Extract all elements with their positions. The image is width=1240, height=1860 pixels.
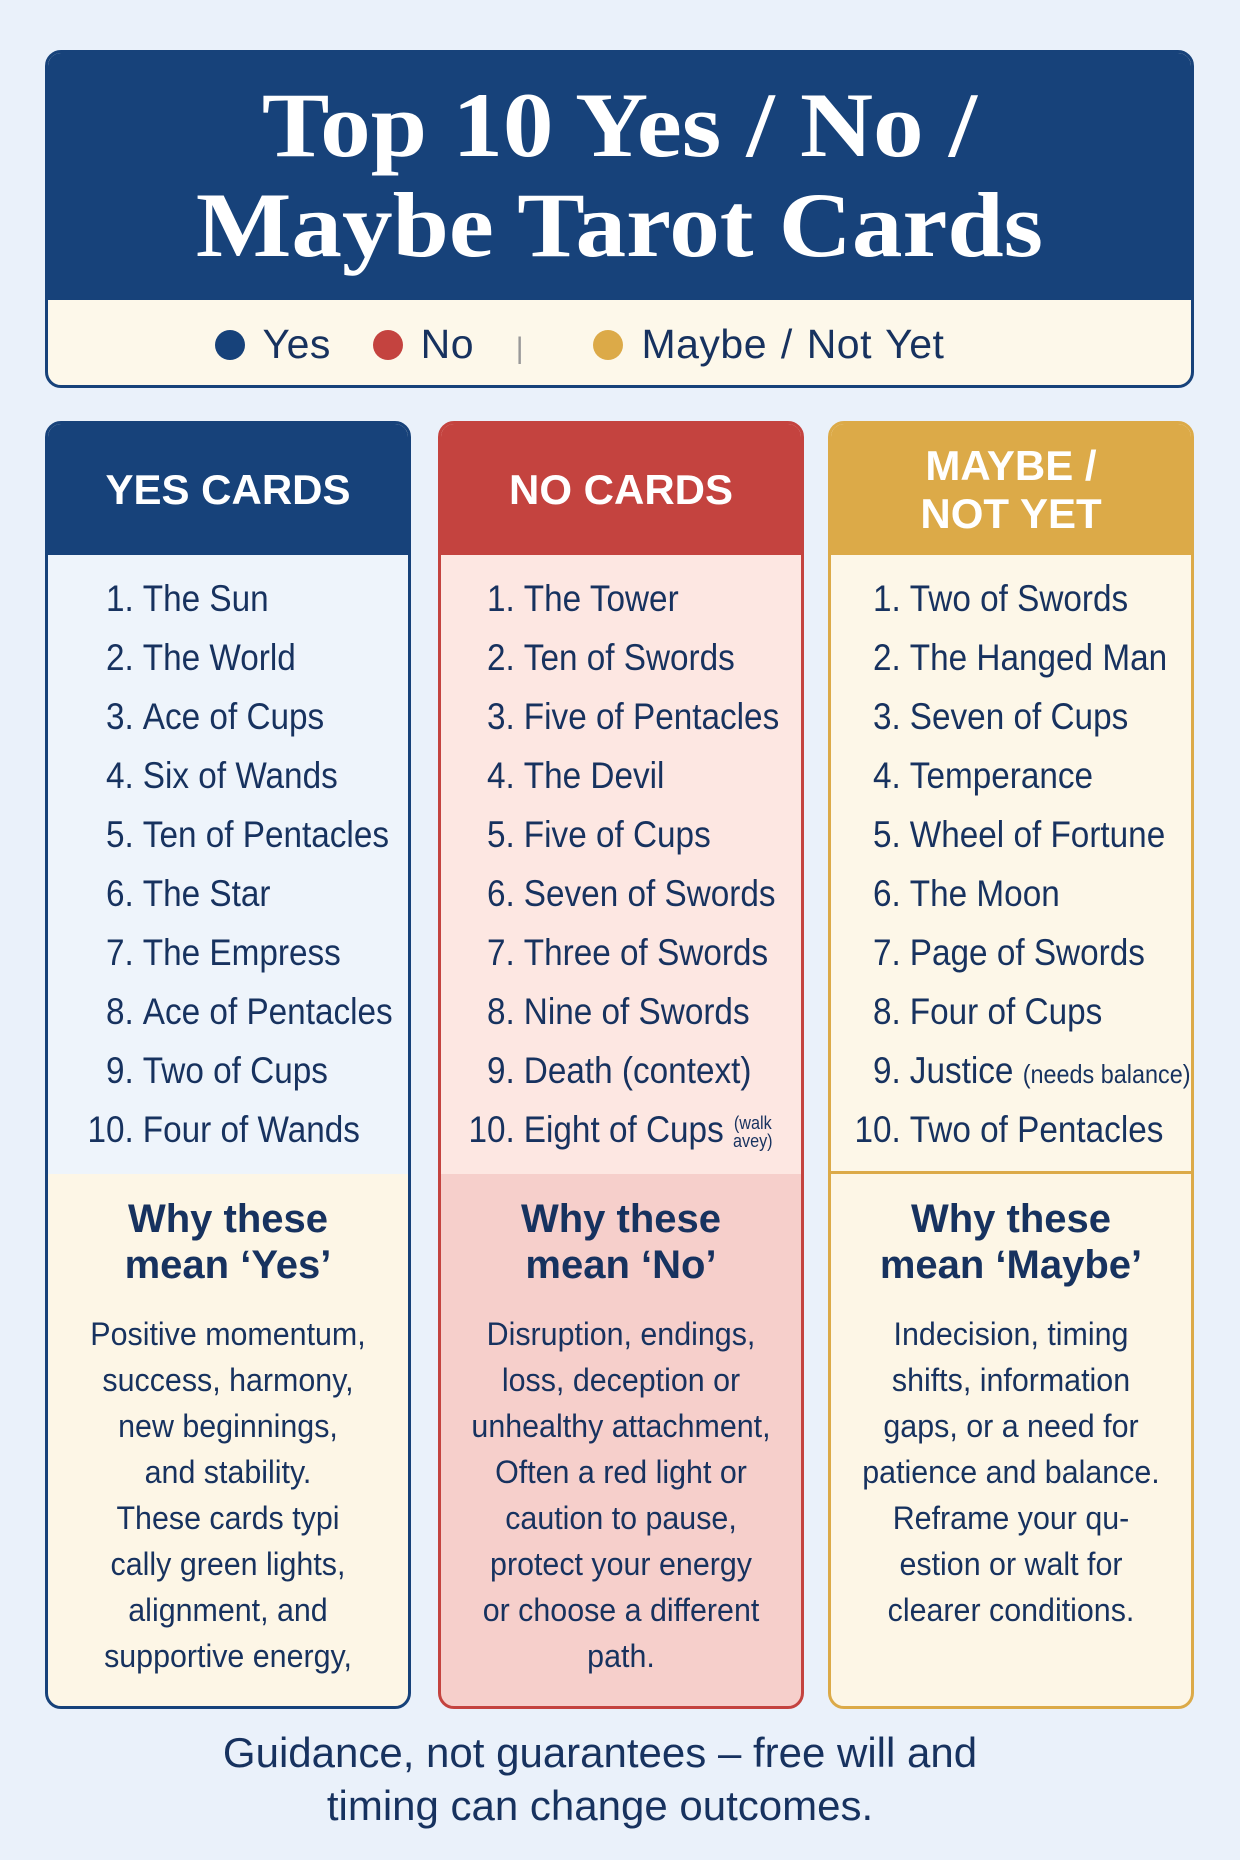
- no list: 8.: [487, 991, 515, 1032]
- yes list: 7.: [106, 932, 134, 973]
- no explanation: unhealthy attachment,: [471, 1408, 771, 1444]
- yes explanation: alignment, and: [128, 1592, 328, 1628]
- legend: Yes No | Maybe / Not Yet: [263, 321, 944, 367]
- maybe explanation: Indecision, timing: [894, 1316, 1128, 1352]
- yes list: 5.: [106, 814, 134, 855]
- maybe header: NOT YET: [920, 490, 1102, 536]
- yes list: 8.: [106, 991, 134, 1032]
- no list: 2.: [487, 637, 515, 678]
- no list: 4.: [487, 755, 515, 796]
- yes list: Four of Wands: [143, 1109, 360, 1150]
- yes list: 3.: [106, 696, 134, 737]
- no list: The Devil: [524, 755, 664, 796]
- no list: 5.: [487, 814, 515, 855]
- no list: avey): [733, 1131, 773, 1151]
- yes list: Ten of Pentacles: [143, 814, 389, 855]
- yes list: The Sun: [143, 578, 269, 619]
- no list: Eight of Cups: [524, 1109, 724, 1150]
- no explanation: protect your energy: [490, 1546, 752, 1582]
- yes list: 9.: [106, 1050, 134, 1091]
- yes explanation: supportive energy,: [104, 1638, 352, 1674]
- no list: 6.: [487, 873, 515, 914]
- no explanation: loss, deception or: [502, 1362, 740, 1398]
- no list: Seven of Swords: [524, 873, 776, 914]
- maybe list: 8.: [873, 991, 901, 1032]
- footer note: Guidance, not guarantees – free will and: [223, 1729, 977, 1776]
- no list: Nine of Swords: [524, 991, 750, 1032]
- no header: NO CARDS: [509, 466, 733, 512]
- yes list: 4.: [106, 755, 134, 796]
- no list: Death (context): [524, 1050, 751, 1091]
- maybe explanation: [862, 1197, 1160, 1628]
- no explanation: Why these: [521, 1197, 721, 1241]
- no explanation: [471, 1197, 771, 1674]
- maybe explanation: mean ‘Maybe’: [880, 1243, 1142, 1287]
- panel: no cards: [438, 421, 804, 1709]
- maybe explanation: shifts, information: [892, 1362, 1130, 1398]
- yes list: 6.: [106, 873, 134, 914]
- yes list: The Empress: [143, 932, 341, 973]
- maybe explanation: patience and balance.: [862, 1454, 1160, 1490]
- yes list: Ace of Pentacles: [143, 991, 393, 1032]
- maybe list: 6.: [873, 873, 901, 914]
- yes explanation: and stability.: [145, 1454, 311, 1490]
- maybe header: [831, 424, 1191, 555]
- title: Maybe Tarot Cards: [196, 174, 1043, 276]
- no explanation: caution to pause,: [505, 1500, 737, 1536]
- maybe list: 9.: [873, 1050, 901, 1091]
- no list: Five of Pentacles: [524, 696, 779, 737]
- yes explanation: These cards typi: [116, 1500, 340, 1536]
- yes explanation: mean ‘Yes’: [125, 1243, 331, 1287]
- header panel: [45, 50, 1194, 388]
- no list: 7.: [487, 932, 515, 973]
- maybe explanation: Reframe your qu-: [893, 1500, 1129, 1536]
- maybe list: 7.: [873, 932, 901, 973]
- maybe list: Two of Swords: [910, 578, 1128, 619]
- title: [196, 74, 1043, 276]
- no explanation: or choose a different: [483, 1592, 759, 1628]
- maybe list: Seven of Cups: [910, 696, 1128, 737]
- no list: Five of Cups: [524, 814, 711, 855]
- yes header: YES CARDS: [105, 466, 351, 512]
- maybe list: Wheel of Fortune: [910, 814, 1165, 855]
- yes explanation: Positive momentum,: [90, 1316, 366, 1352]
- no list: The Tower: [524, 578, 679, 619]
- no list: Ten of Swords: [524, 637, 735, 678]
- no list: 1.: [487, 578, 515, 619]
- maybe list: The Hanged Man: [910, 637, 1167, 678]
- maybe list: Temperance: [910, 755, 1093, 796]
- maybe list: 1.: [873, 578, 901, 619]
- maybe explanation: Why these: [911, 1197, 1111, 1241]
- maybe list: 3.: [873, 696, 901, 737]
- yes header: [48, 424, 408, 555]
- yes explanation: success, harmony,: [102, 1362, 354, 1398]
- maybe list: 10.: [855, 1109, 901, 1150]
- no explanation: Often a red light or: [495, 1454, 747, 1490]
- maybe list: Justice (needs balance): [910, 1050, 1191, 1091]
- yes list: The Star: [143, 873, 271, 914]
- yes explanation: [90, 1197, 366, 1674]
- footer note: timing can change outcomes.: [327, 1782, 873, 1829]
- maybe list: Page of Swords: [910, 932, 1145, 973]
- footer note: [223, 1729, 977, 1829]
- yes explanation: Why these: [128, 1197, 328, 1241]
- yes list: 2.: [106, 637, 134, 678]
- no explanation: mean ‘No’: [525, 1243, 717, 1287]
- yes list: Ace of Cups: [143, 696, 324, 737]
- no header: [441, 424, 801, 555]
- panel: maybe cards: [828, 421, 1194, 1709]
- yes list: 1.: [106, 578, 134, 619]
- yes list: The World: [143, 637, 296, 678]
- title: Top 10 Yes / No /: [262, 74, 977, 176]
- maybe explanation: gaps, or a need for: [883, 1408, 1139, 1444]
- no explanation: path.: [587, 1638, 655, 1674]
- no list: (walk: [734, 1113, 772, 1133]
- maybe list: [831, 555, 1191, 1174]
- no list: 3.: [487, 696, 515, 737]
- yes explanation: new beginnings,: [118, 1408, 338, 1444]
- maybe list: Four of Cups: [910, 991, 1102, 1032]
- no list: 9.: [487, 1050, 515, 1091]
- panel: yes cards: [45, 421, 411, 1709]
- yes list: Two of Cups: [143, 1050, 328, 1091]
- no list: Three of Swords: [524, 932, 768, 973]
- maybe list: 2.: [873, 637, 901, 678]
- maybe list: 4.: [873, 755, 901, 796]
- yes list: Six of Wands: [143, 755, 338, 796]
- maybe list: The Moon: [910, 873, 1060, 914]
- maybe explanation: estion or walt for: [899, 1546, 1123, 1582]
- no explanation: Disruption, endings,: [487, 1316, 755, 1352]
- maybe explanation: clearer conditions.: [888, 1592, 1134, 1628]
- yes list: [48, 555, 408, 1174]
- no list: 10.: [469, 1109, 515, 1150]
- maybe list: 5.: [873, 814, 901, 855]
- yes explanation: cally green lights,: [111, 1546, 345, 1582]
- maybe header: MAYBE /: [925, 442, 1097, 488]
- no list: [441, 555, 801, 1174]
- yes list: 10.: [88, 1109, 134, 1150]
- maybe list: Two of Pentacles: [910, 1109, 1163, 1150]
